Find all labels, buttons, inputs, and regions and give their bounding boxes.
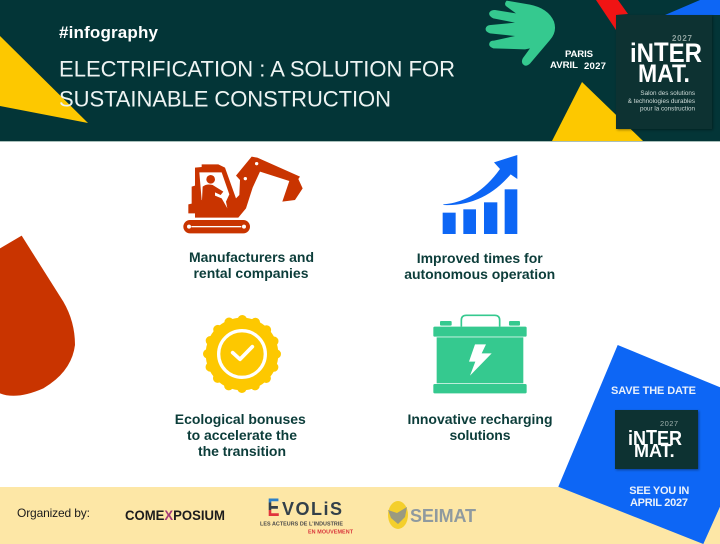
event place and date: PARIS	[565, 49, 594, 60]
logo: Evolis: VOLiS	[282, 499, 342, 519]
heading: save the date: SAVE THE DATE	[611, 385, 696, 397]
decorative yellow triangle centre	[552, 82, 643, 141]
logo: Evolis: LES ACTEURS DE L'INDUSTRIE	[260, 522, 343, 528]
logo: Evolis: EN MOUVEMENT	[308, 530, 354, 536]
title	[59, 56, 455, 112]
caption	[175, 411, 306, 459]
icon: check badge	[206, 318, 278, 390]
icon: battery	[433, 315, 527, 393]
caption: solutions	[450, 427, 511, 443]
title: SUSTAINABLE CONSTRUCTION	[59, 86, 391, 112]
text: see you in april 2027: SEE YOU IN	[629, 485, 689, 497]
caption: autonomous operation	[404, 266, 555, 282]
item: manufacturers	[183, 157, 314, 281]
logo box: Intermat	[616, 15, 712, 129]
logo box: Intermat: 2027	[672, 34, 693, 43]
text: see you in april 2027	[629, 485, 689, 509]
panel: save the date	[558, 345, 720, 544]
logo box: Intermat small: T	[646, 426, 657, 449]
hashtag: #infography	[59, 23, 159, 42]
item: ecological bonuses	[175, 318, 306, 459]
decorative red shape	[596, 0, 628, 30]
logo box: Intermat: MAT.	[638, 60, 690, 88]
icon: excavator	[183, 157, 303, 233]
logo: Seimat: SEIMAT	[410, 506, 476, 526]
label: organized by: Organized by:	[17, 506, 90, 520]
logo: Evolis	[260, 494, 354, 536]
logo box: Intermat: Salon des solutions	[640, 90, 695, 97]
logo: Evolis: E	[268, 494, 280, 522]
caption: Manufacturers and	[189, 249, 314, 265]
logo: Comexposium: COMEXPOSIUM	[125, 507, 225, 523]
decorative yellow triangle left	[0, 36, 88, 123]
title: ELECTRIFICATION : A SOLUTION FOR	[59, 56, 455, 82]
caption: Innovative recharging	[408, 411, 552, 427]
text: see you in april 2027: APRIL 2027	[630, 497, 688, 509]
item: autonomy	[404, 155, 555, 282]
item: recharging	[408, 315, 552, 443]
panel: header banner	[0, 0, 720, 142]
caption	[408, 411, 552, 443]
icon: growth chart	[443, 155, 517, 234]
decorative red drop	[0, 236, 75, 396]
event place and date: 2027	[584, 61, 606, 72]
caption	[404, 250, 555, 282]
event place and date	[550, 49, 606, 72]
logo: Seimat	[388, 501, 476, 529]
caption	[189, 249, 314, 281]
caption: Ecological bonuses	[175, 411, 306, 427]
logo box: Intermat small	[615, 410, 698, 469]
icon: green hand	[486, 1, 555, 66]
event place and date: AVRIL	[550, 60, 578, 71]
caption: to accelerate the	[187, 427, 297, 443]
logo box: Intermat: T	[654, 38, 669, 67]
logo box: Intermat: iN	[630, 39, 654, 68]
logo box: Intermat: pour la construction	[640, 106, 695, 112]
panel: footer	[0, 487, 720, 544]
logo box: Intermat small: 2027	[660, 419, 678, 428]
logo box: Intermat small: iN	[628, 427, 646, 450]
logo box: Intermat small: MAT.	[634, 441, 675, 461]
logo box: Intermat small: ER	[657, 427, 682, 450]
logo box: Intermat: & technologies durables	[628, 98, 695, 105]
decorative blue shape	[665, 0, 720, 15]
caption: Improved times for	[417, 250, 543, 266]
logo box: Intermat: ER	[669, 39, 702, 68]
caption: the transition	[198, 443, 286, 459]
caption: rental companies	[194, 265, 309, 281]
